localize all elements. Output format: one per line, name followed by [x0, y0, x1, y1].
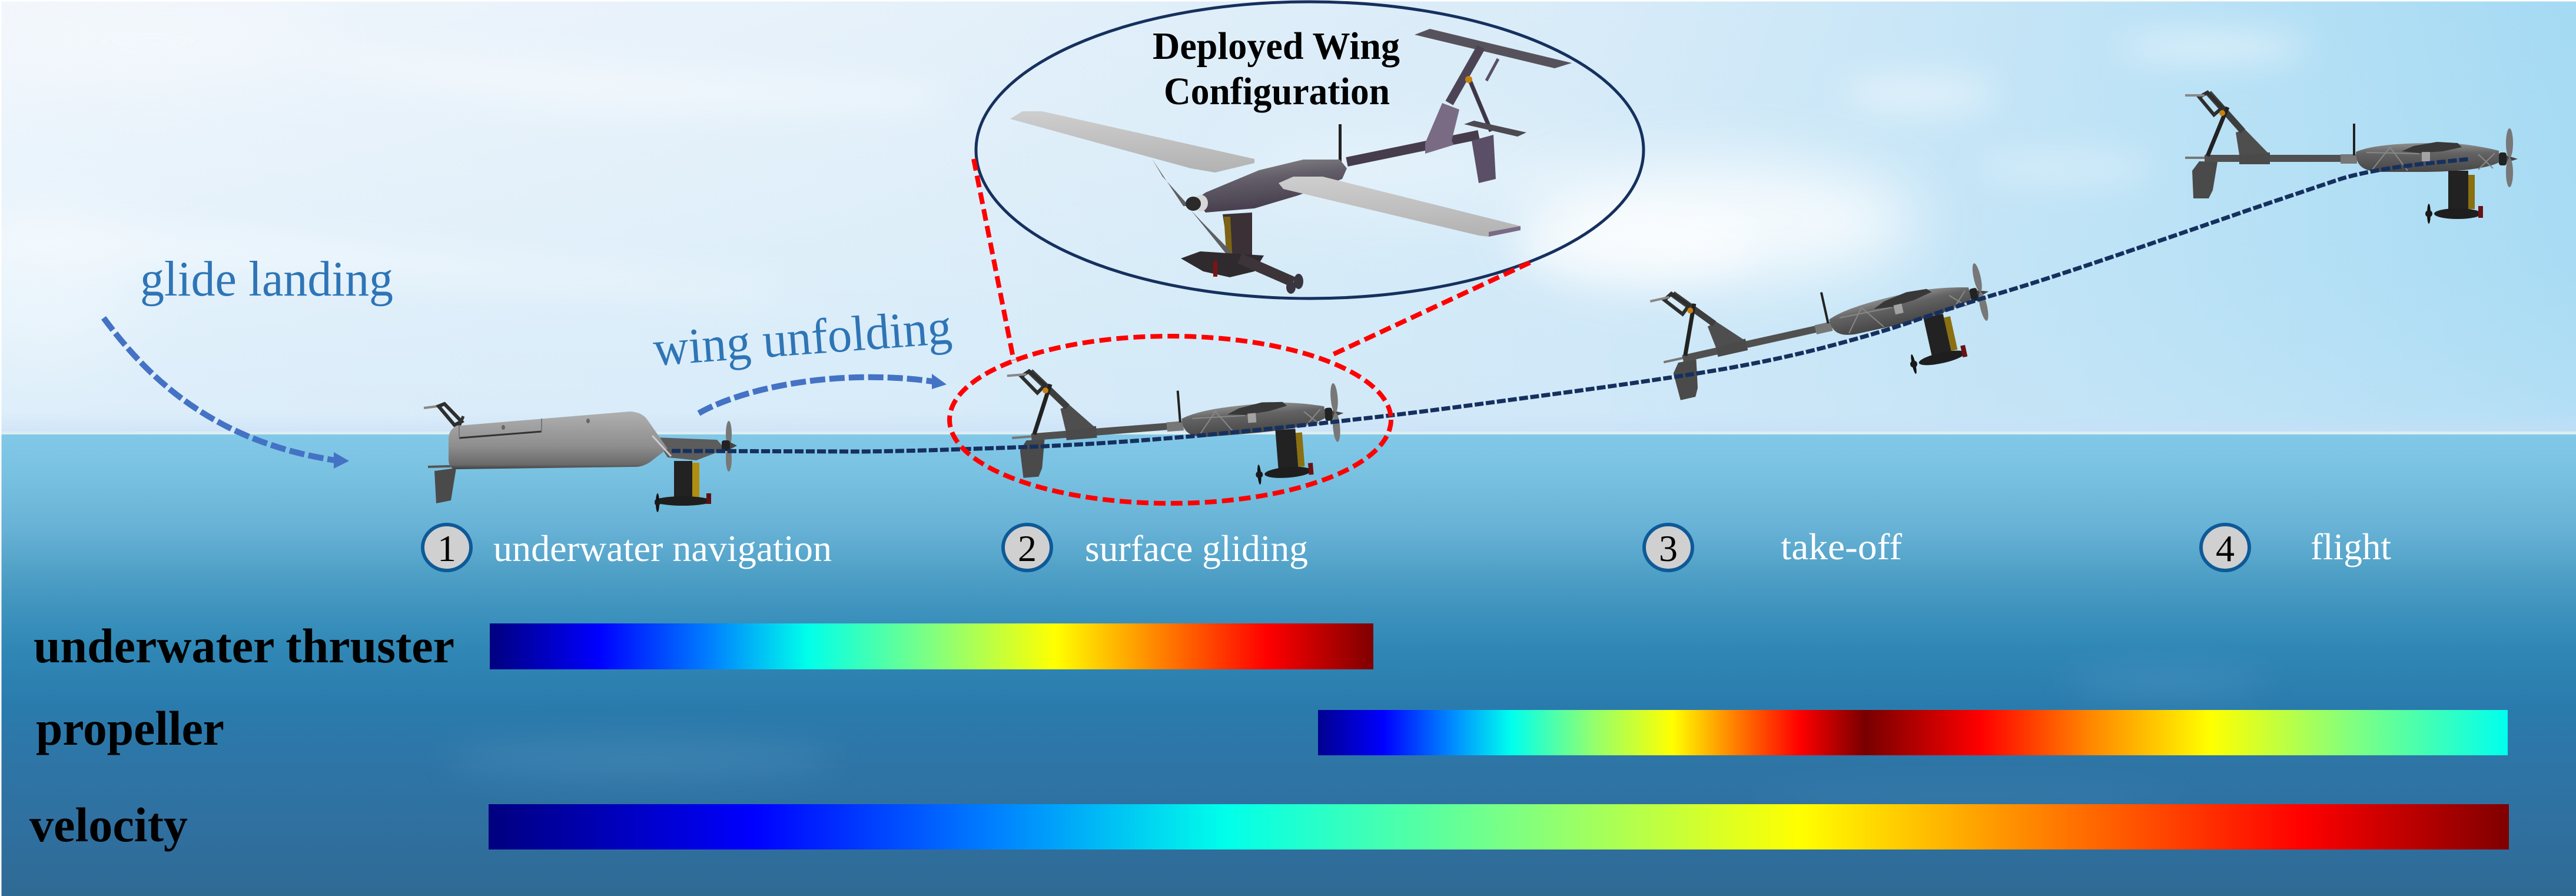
- drone: take-off: [1649, 227, 2003, 427]
- step 4: 4: [2216, 527, 2235, 569]
- colour bar: propeller: [1318, 710, 2508, 755]
- arrow: wing unfolding: [699, 374, 947, 413]
- step 4: flight: [2311, 526, 2391, 568]
- label: propeller: propeller: [36, 701, 224, 755]
- drone: flight: [2185, 92, 2518, 224]
- inset drone: [1010, 29, 1572, 294]
- step 3: [1644, 525, 1902, 570]
- step 1: 1: [437, 527, 456, 569]
- sea background: [0, 432, 2576, 896]
- step 3: 3: [1659, 527, 1678, 569]
- sky background: [0, 0, 2576, 436]
- step 2: [1003, 525, 1308, 570]
- drone: surface gliding: [1007, 347, 1349, 504]
- label: wing unfolding: wing unfolding: [651, 299, 954, 377]
- trajectory dashed line: [672, 159, 2470, 452]
- label: underwater thruster: underwater thruster: [34, 619, 454, 673]
- drone: underwater navigation with hull: [424, 404, 737, 512]
- step 2: 2: [1018, 527, 1037, 569]
- colour bar: underwater thruster: [490, 623, 1373, 669]
- zoom callout: red dashed ellipse with connector lines: [950, 159, 1530, 503]
- label: velocity: velocity: [29, 798, 188, 852]
- inset: deployed wing configuration: [976, 2, 1644, 298]
- step 4: [2201, 525, 2391, 570]
- step 1: underwater navigation: [493, 528, 832, 569]
- inset title: Deployed Wing: [1153, 25, 1400, 68]
- step 2: surface gliding: [1085, 528, 1308, 569]
- inset title: Configuration: [1164, 70, 1390, 113]
- label: glide landing: glide landing: [140, 251, 393, 307]
- inset title: [1153, 25, 1400, 113]
- colour bar: velocity: [489, 804, 2509, 849]
- step 3: take-off: [1781, 526, 1902, 568]
- arrow: glide landing: [104, 318, 349, 469]
- inset ellipse outline: [976, 2, 1644, 298]
